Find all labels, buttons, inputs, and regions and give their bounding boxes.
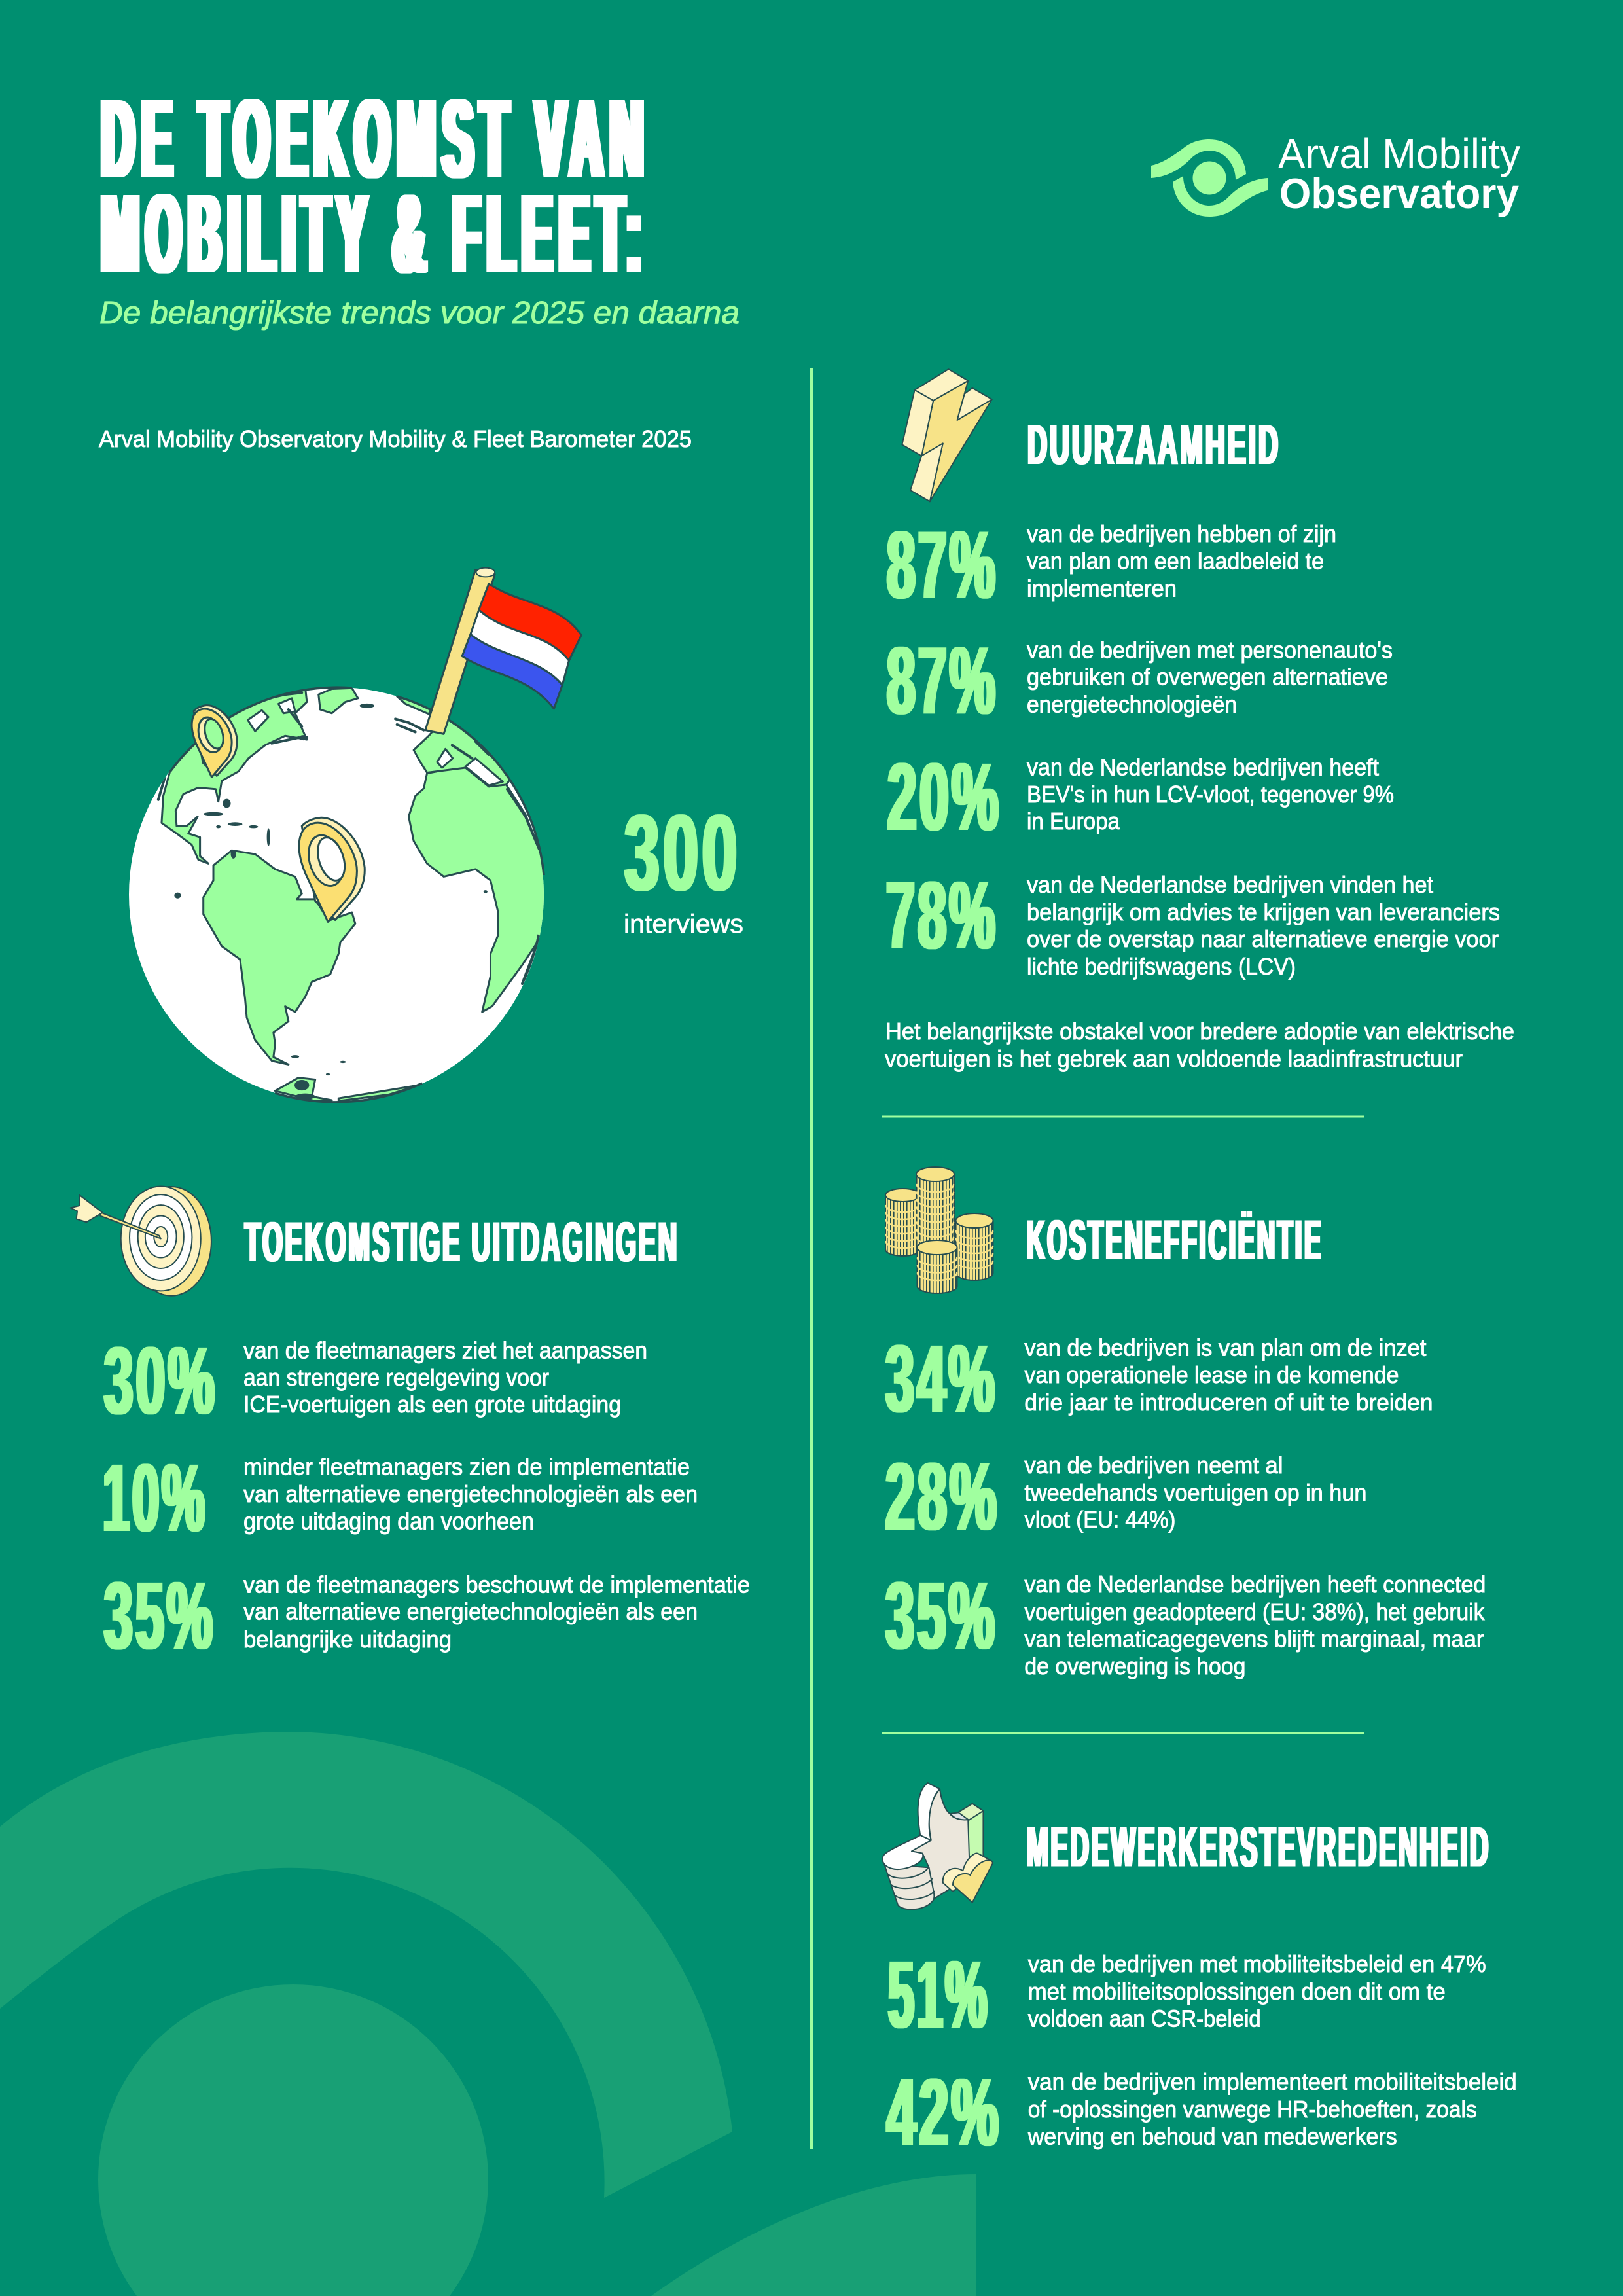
stat: 10%: grote uitdaging dan voorheen [243, 1508, 534, 1534]
stat: 35%: 35% [104, 1562, 215, 1670]
stat: 30%: 30% [104, 1327, 217, 1435]
stat: 87% alternative energy [887, 627, 1393, 734]
panel: duurzaamheid [885, 369, 1514, 1072]
stat: 35% connected: de overweging is hoog [1024, 1653, 1245, 1679]
panel: duurzaamheid: DUURZAAMHEID [1027, 414, 1281, 476]
panel: medewerkerstevredenheid [882, 1783, 1517, 2166]
stat: 10%: van alternatieve energietechnologieën als een [243, 1480, 698, 1507]
text: DE TOEKOMST VAN [101, 77, 651, 202]
stat: 42%: of -oplossingen vanwege HR-behoeften, zoals [1028, 2096, 1477, 2123]
text: main obstacle [885, 1018, 1514, 1072]
stat: 35%: van alternatieve energietechnologieën als een [243, 1598, 698, 1625]
stat: 300 interviews: 300 [624, 793, 741, 914]
stat: 20%: van de Nederlandse bedrijven heeft [1027, 753, 1379, 780]
stat: 28%: van de bedrijven neemt al [1024, 1452, 1283, 1479]
stat: 78%: lichte bedrijfswagens (LCV) [1027, 953, 1296, 980]
text: main obstacle: voertuigen is het gebrek aan voldoende laadinfrastructuur [885, 1045, 1463, 1072]
illustration: globe with flag and pins [129, 568, 581, 1102]
stat: 34%: 34% [885, 1325, 997, 1433]
stat: 78%: van de Nederlandse bedrijven vinden het [1027, 871, 1433, 898]
stat: 30% [104, 1327, 647, 1435]
stat: 51%: met mobiliteitsoplossingen doen dit om te [1028, 1978, 1446, 2005]
stat: 20% [887, 744, 1394, 851]
stat: 87% alternative energy: 87% [887, 627, 998, 734]
stat: 35% connected [885, 1562, 1486, 1679]
stat: 300 interviews [624, 793, 743, 939]
stat: 10% [103, 1444, 698, 1552]
stat: 30%: van de fleetmanagers ziet het aanpassen [243, 1337, 647, 1364]
stat: 35% connected: 35% [885, 1562, 997, 1670]
stat: 87% alternative energy: energietechnologieën [1027, 691, 1237, 717]
stat: 30%: ICE-voertuigen als een grote uitdaging [243, 1391, 621, 1418]
stat: 87% alternative energy: gebruiken of overwegen alternatieve [1027, 664, 1388, 691]
stat: 28%: vloot (EU: 44%) [1024, 1506, 1175, 1533]
stat: 10%: 10% [103, 1444, 207, 1552]
panel: kostenefficientie [885, 1167, 1486, 1679]
logo: Arval Mobility Observatory [1151, 130, 1520, 217]
stat: 42% [887, 2059, 1517, 2166]
stat: 35%: belangrijke uitdaging [243, 1626, 452, 1653]
icon: target with dart [71, 1186, 211, 1296]
text: MOBILITY & FLEET: [101, 171, 649, 296]
stat: 34%: drie jaar te introduceren of uit te breiden [1024, 1389, 1433, 1416]
background logo shapes [0, 1732, 976, 2296]
stat: 87% charging policy: implementeren [1027, 575, 1177, 602]
stat: 34%: van operationele lease in de komende [1024, 1361, 1399, 1388]
barometer label: Arval Mobility Observatory Mobility & Fleet Barometer 2025 [99, 425, 692, 452]
text: main obstacle: Het belangrijkste obstakel voor bredere adoptie van elektrische [885, 1018, 1514, 1045]
stat: 87% charging policy [887, 512, 1336, 619]
stat: 20%: in Europa [1027, 808, 1120, 834]
stat: 51%: van de bedrijven met mobiliteitsbeleid en 47% [1028, 1950, 1486, 1977]
title [101, 77, 651, 296]
stat: 34% [885, 1325, 1433, 1433]
stat: 35% [104, 1562, 750, 1670]
stat: 42%: 42% [887, 2059, 1001, 2166]
stat: 51%: voldoen aan CSR-beleid [1028, 2005, 1261, 2032]
stat: 78% [886, 862, 1500, 980]
location pin: North America [192, 706, 237, 777]
stat: 34%: van de bedrijven is van plan om de inzet [1024, 1335, 1426, 1361]
stat: 51% [888, 1941, 1486, 2049]
stat: 20%: BEV's in hun LCV-vloot, tegenover 9% [1027, 781, 1394, 808]
stat: 35% connected: van de Nederlandse bedrijven heeft connected [1024, 1571, 1486, 1598]
stat: 87% charging policy: van plan om een laadbeleid te [1027, 548, 1324, 575]
stat: 78%: over de overstap naar alternatieve energie voor [1027, 925, 1499, 952]
stat: 35% connected: voertuigen geadopteerd (EU: 38%), het gebruik [1024, 1598, 1485, 1625]
stat: 42%: van de bedrijven implementeert mobiliteitsbeleid [1028, 2068, 1517, 2095]
icon: coin stacks [885, 1167, 993, 1293]
stat: 28% [885, 1443, 1366, 1551]
divider [882, 1732, 1364, 1734]
stat: 300 interviews: interviews [624, 910, 743, 939]
subtitle: De belangrijkste trends voor 2025 en daarna [99, 296, 740, 331]
stat: 42%: werving en behoud van medewerkers [1027, 2123, 1397, 2150]
flag pole [425, 568, 581, 734]
stat: 78%: belangrijk om advies te krijgen van leveranciers [1027, 899, 1500, 925]
vertical divider [810, 368, 813, 2149]
logo: Arval Mobility Observatory: Observatory [1279, 170, 1519, 217]
stat: 28%: 28% [885, 1443, 999, 1551]
continents [158, 687, 547, 1101]
stat: 51%: 51% [888, 1941, 990, 2049]
panel: toekomstige uitdagingen [71, 1186, 750, 1670]
globe coastline outline [170, 687, 544, 1102]
stat: 20%: 20% [887, 744, 1001, 851]
location pin: South America [299, 817, 365, 922]
stat: 10%: minder fleetmanagers zien de implementatie [243, 1454, 690, 1480]
stat: 35% connected: van telematicagegevens blijft marginaal, maar [1024, 1626, 1484, 1653]
icon: thumbs up with heart [882, 1783, 993, 1909]
logo mark [1151, 139, 1268, 217]
divider [882, 1115, 1364, 1118]
globe [129, 687, 544, 1102]
stat: 87% alternative energy: van de bedrijven met personenauto's [1027, 636, 1393, 663]
logo text: Arval Mobility [1278, 130, 1520, 177]
flag of the Netherlands [462, 584, 581, 709]
stat: 78%: 78% [886, 862, 998, 969]
stat: 28%: tweedehands voertuigen op in hun [1024, 1479, 1366, 1506]
panel: toekomstige uitdagingen: TOEKOMSTIGE UITDAGINGEN [245, 1211, 679, 1274]
stat: 87% charging policy: 87% [887, 512, 998, 619]
icon: lightning bolt [902, 369, 992, 501]
stat: 35%: van de fleetmanagers beschouwt de implementatie [243, 1571, 750, 1598]
stat: 30%: aan strengere regelgeving voor [243, 1364, 549, 1391]
stat: 87% charging policy: van de bedrijven hebben of zijn [1027, 520, 1336, 547]
